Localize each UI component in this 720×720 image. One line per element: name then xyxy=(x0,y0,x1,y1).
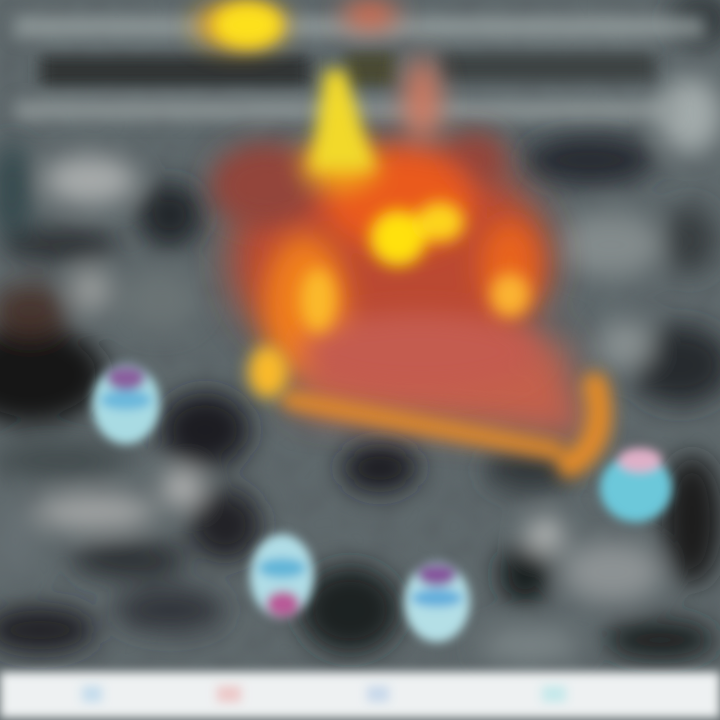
yellow hot spots xyxy=(214,3,530,398)
badge: right xyxy=(600,448,672,522)
badge: left xyxy=(92,364,160,444)
orange rim of fire xyxy=(290,385,599,465)
badge: lower centre right xyxy=(404,562,470,642)
title band xyxy=(15,16,705,120)
footer legend bar xyxy=(0,672,720,718)
badge: lower centre left xyxy=(250,534,314,618)
explosion: flames xyxy=(230,145,590,440)
callout badges xyxy=(92,364,672,642)
